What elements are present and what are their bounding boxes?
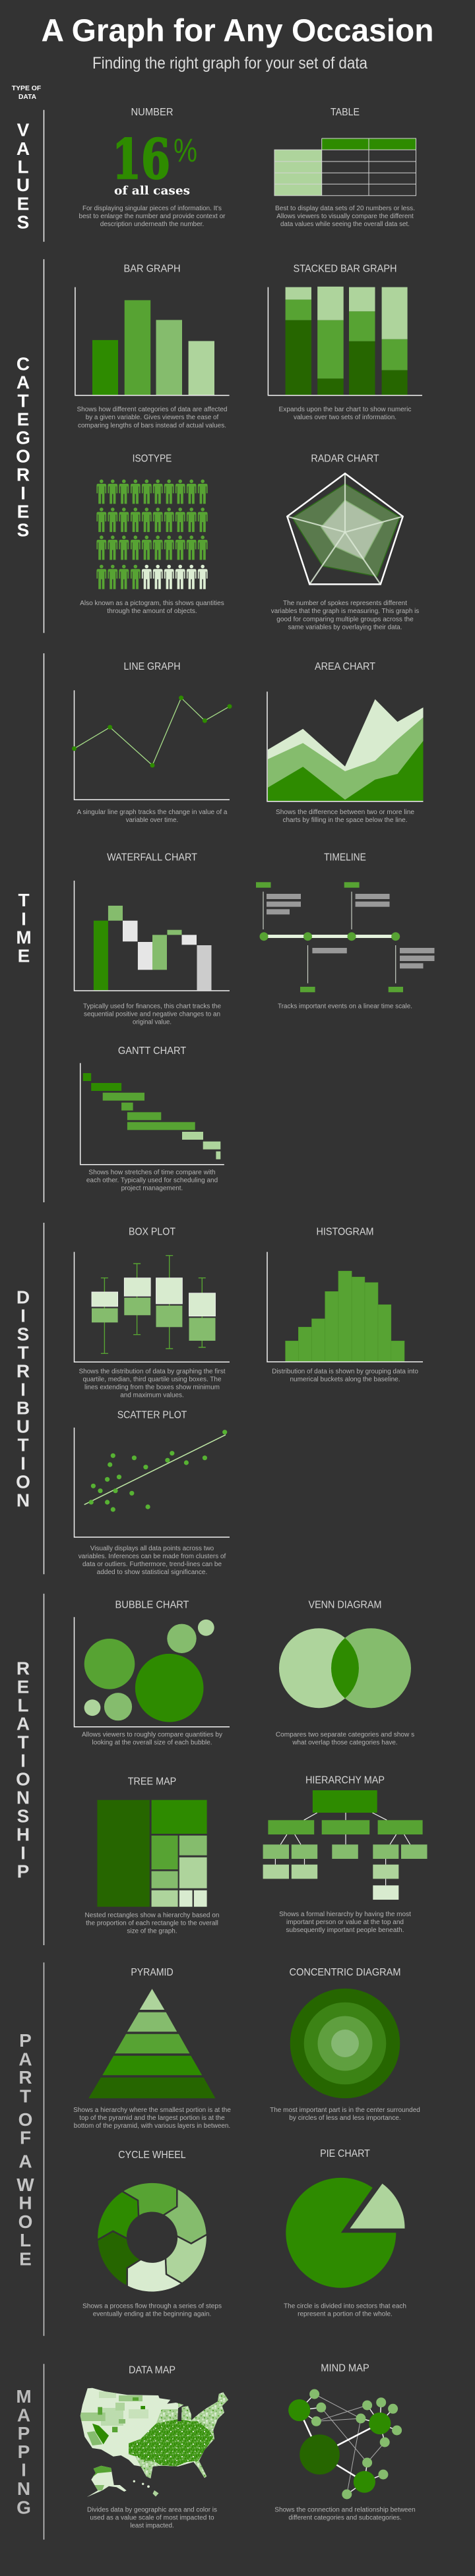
- description: hierarchy map: important person or value at the top and: [286, 1919, 404, 1926]
- heading: pyramid: PYRAMID: [131, 1967, 174, 1978]
- section: distribution: [16, 1223, 423, 1576]
- description: bar graph: comparing lengths of bars instead of actual values.: [78, 422, 226, 429]
- venn diagram graphic: [279, 1628, 411, 1708]
- description: hierarchy map: subsequently important people beneath.: [286, 1927, 404, 1934]
- big number 16 percent: of all cases: [114, 184, 190, 198]
- heading: waterfall chart: WATERFALL CHART: [107, 852, 197, 864]
- panel: isotype: [80, 454, 224, 615]
- section label: categories: S: [17, 519, 29, 540]
- description: number: For displaying singular pieces of information. It's: [82, 205, 222, 212]
- description: scatter plot: Visually displays all data points across two: [90, 1545, 214, 1552]
- heading: cycle wheel: CYCLE WHEEL: [118, 2150, 186, 2161]
- description: concentric diagram: The most important part is in the center surrounded: [270, 2107, 420, 2114]
- section rule: time: [44, 653, 45, 1202]
- description: line graph: A singular line graph tracks the change in value of a: [77, 809, 228, 816]
- description: venn diagram: what overlap those categories have.: [292, 1740, 398, 1747]
- section label: mapping: I: [21, 2460, 26, 2480]
- heading: histogram: HISTOGRAM: [317, 1226, 373, 1237]
- section label: relationship: T: [17, 1732, 29, 1752]
- section rule: values: [44, 110, 45, 242]
- description: pie chart: [284, 2302, 406, 2318]
- heading: mind map: MIND MAP: [321, 2362, 369, 2374]
- section label: part of a whole: R: [18, 2067, 32, 2088]
- big number 16 percent: 16: [112, 129, 170, 192]
- section: categories: [16, 259, 422, 633]
- panel: line graph: [72, 661, 232, 824]
- panel: gantt chart: [80, 1045, 224, 1192]
- pie chart graphic: [286, 2178, 405, 2288]
- panel: pie chart: [284, 2148, 406, 2318]
- description: hierarchy map: [279, 1911, 411, 1934]
- section label: values: V: [17, 120, 30, 140]
- heading: line graph: LINE GRAPH: [124, 661, 181, 672]
- description: data map: [87, 2507, 217, 2530]
- description: gantt chart: [86, 1169, 218, 1192]
- section label: time: I: [21, 908, 26, 929]
- section label: mapping: G: [16, 2497, 31, 2517]
- section label: distribution: O: [16, 1471, 30, 1492]
- description: venn diagram: Compares two separate categories and show s: [276, 1732, 414, 1739]
- description: gantt chart: project management.: [121, 1185, 183, 1192]
- panel: data map: [76, 2365, 231, 2530]
- description: bar graph: by a given variable. Gives viewers the ease of: [86, 414, 219, 421]
- description: data map: used as a value scale of most impacted to: [90, 2515, 214, 2522]
- heading: radar chart: RADAR CHART: [311, 454, 379, 464]
- description: box plot: Shows the distribution of data by graphing the first: [79, 1368, 226, 1375]
- box plot graphic: [74, 1252, 230, 1362]
- section label: relationship: I: [20, 1842, 26, 1863]
- panel: venn diagram: [276, 1599, 414, 1747]
- section label: part of a whole: P: [19, 2030, 32, 2051]
- description: pyramid: bottom of the pyramid, with various layers in between.: [74, 2122, 230, 2130]
- description: box plot: quartile, median, third quartile using boxes. The: [83, 1376, 222, 1383]
- section label: distribution: U: [16, 1416, 30, 1436]
- section label: relationship: A: [16, 1713, 30, 1734]
- description: area chart: charts by filling in the space below the line.: [282, 817, 408, 824]
- description: scatter plot: variables. Inferences can be made from clusters of: [79, 1553, 226, 1560]
- table graphic: [274, 138, 416, 196]
- title: A Graph for Any Occasion: [41, 13, 434, 48]
- section label: distribution: I: [20, 1379, 26, 1399]
- section label: distribution: S: [17, 1324, 29, 1344]
- description: histogram: [272, 1368, 418, 1383]
- section label: mapping: A: [17, 2405, 30, 2425]
- description: hierarchy map: Shows a formal hierarchy by having the most: [279, 1911, 411, 1918]
- section label: relationship: I: [20, 1750, 26, 1771]
- section label: distribution: I: [20, 1305, 26, 1326]
- panel: histogram: [267, 1226, 423, 1383]
- description: bubble chart: [82, 1732, 222, 1747]
- description: pyramid: top of the pyramid and the largest portion is at the: [79, 2115, 225, 2122]
- section label: time: M: [16, 927, 32, 948]
- description: waterfall chart: sequential positive and negative changes to an: [84, 1010, 220, 1018]
- panel: concentric diagram: [270, 1967, 420, 2122]
- panel: area chart: [267, 661, 424, 824]
- description: box plot: [79, 1368, 226, 1399]
- map inset: alaska: [87, 2466, 127, 2497]
- section label: relationship: S: [17, 1805, 29, 1826]
- description: radar chart: variables that the graph is measuring. This graph is: [271, 608, 419, 615]
- section: mapping: [16, 2362, 416, 2540]
- description: isotype: through the amount of objects.: [107, 608, 197, 615]
- section label: mapping: P: [18, 2423, 30, 2444]
- description: radar chart: good for comparing multiple groups across the: [276, 616, 414, 624]
- description: mind map: Shows the connection and relationship between: [274, 2507, 416, 2514]
- section label: values: U: [16, 175, 30, 195]
- radar chart graphic: [287, 473, 403, 584]
- heading: box plot: BOX PLOT: [129, 1226, 175, 1237]
- section label: distribution: N: [16, 1490, 30, 1510]
- description: bar graph: Shows how different categories of data are affected: [77, 406, 227, 413]
- description: number: description underneath the number.: [100, 221, 204, 228]
- description: table: [275, 205, 415, 228]
- data map graphic: [76, 2383, 231, 2497]
- concentric diagram graphic: [290, 1989, 400, 2098]
- panel: timeline: [256, 852, 434, 1010]
- histogram graphic: [267, 1252, 423, 1362]
- description: bubble chart: looking at the overall size of each bubble.: [92, 1740, 212, 1747]
- isotype pictogram: [96, 479, 208, 589]
- section: part of a whole: [16, 1962, 420, 2336]
- section: relationship: [16, 1594, 428, 1945]
- section label: part of a whole: L: [20, 2230, 31, 2250]
- description: pyramid: [73, 2107, 231, 2130]
- section label: time: E: [18, 945, 30, 966]
- description: cycle wheel: Shows a process flow through a series of steps: [82, 2302, 222, 2310]
- section label: mapping: M: [16, 2386, 32, 2407]
- description: mind map: [274, 2507, 416, 2522]
- section label: categories: E: [17, 501, 29, 521]
- section label: relationship: E: [17, 1676, 29, 1697]
- description: bar graph: [77, 406, 227, 429]
- description: bubble chart: Allows viewers to roughly compare quantities by: [82, 1732, 222, 1739]
- section label: relationship: N: [16, 1787, 30, 1807]
- description: concentric diagram: by circles of less and less importance.: [289, 2115, 401, 2122]
- heading: stacked bar graph: STACKED BAR GRAPH: [293, 264, 397, 275]
- description: gantt chart: each other. Typically used for scheduling and: [86, 1177, 218, 1184]
- description: tree map: the proportion of each rectangle to the overall: [86, 1919, 218, 1927]
- section label: values: L: [17, 156, 29, 177]
- description: data map: least impacted.: [130, 2523, 174, 2530]
- description: table: Allows viewers to visually compare the different: [276, 213, 414, 220]
- description: area chart: [276, 809, 414, 824]
- section label: mapping: N: [17, 2478, 30, 2499]
- description: table: Best to display data sets of 20 numbers or less.: [275, 205, 415, 212]
- description: radar chart: The number of spokes represents different: [283, 600, 407, 607]
- cycle wheel graphic: [97, 2182, 207, 2293]
- panel: cycle wheel: [82, 2150, 222, 2318]
- section label: categories: O: [16, 446, 30, 466]
- section label: distribution: D: [16, 1287, 30, 1307]
- description: waterfall chart: [83, 1003, 221, 1026]
- description: number: best to enlarge the number and provide context or: [79, 213, 226, 220]
- waterfall chart graphic: [74, 881, 230, 991]
- panel: bar graph: [75, 264, 230, 429]
- section label: categories: A: [16, 372, 30, 392]
- section label: values: S: [17, 212, 29, 233]
- section rule: part of a whole: [44, 1962, 45, 2336]
- section label: relationship: O: [16, 1769, 30, 1789]
- section label: values: A: [16, 138, 30, 159]
- description: gantt chart: Shows how stretches of time compare with: [88, 1169, 216, 1176]
- section label: part of a whole: E: [19, 2249, 32, 2269]
- section label: categories: E: [17, 409, 29, 429]
- column label: type of data: DATA: [18, 93, 36, 101]
- section label: part of a whole: A: [18, 2151, 32, 2171]
- section label: distribution: B: [16, 1397, 30, 1418]
- stacked bar chart: [268, 287, 422, 395]
- description: tree map: [84, 1912, 219, 1935]
- panel: radar chart: [271, 454, 419, 631]
- section label: categories: I: [20, 483, 26, 503]
- description: line graph: [77, 809, 228, 824]
- section label: distribution: T: [17, 1342, 29, 1362]
- description: venn diagram: [276, 1732, 414, 1747]
- section label: categories: G: [16, 427, 30, 448]
- description: number: [79, 205, 226, 228]
- panel: bubble chart: [74, 1599, 230, 1747]
- section label: mapping: P: [18, 2442, 30, 2462]
- heading: hierarchy map: HIERARCHY MAP: [305, 1775, 385, 1786]
- big number 16 percent: %: [174, 132, 197, 169]
- heading: pie chart: PIE CHART: [320, 2148, 370, 2159]
- heading: concentric diagram: CONCENTRIC DIAGRAM: [289, 1967, 401, 1978]
- section label: relationship: H: [16, 1824, 30, 1844]
- scatter plot graphic: [74, 1428, 230, 1537]
- description: box plot: and maximum values.: [120, 1391, 184, 1399]
- heading: isotype: ISOTYPE: [133, 454, 172, 464]
- heading: number: NUMBER: [131, 107, 173, 118]
- description: histogram: Distribution of data is shown by grouping data into: [272, 1368, 418, 1375]
- section label: part of a whole: W: [16, 2175, 34, 2195]
- section label: categories: T: [17, 390, 29, 411]
- description: stacked bar graph: values over two sets of information.: [294, 414, 396, 421]
- mind map graphic: [288, 2389, 402, 2500]
- section label: part of a whole: F: [20, 2128, 31, 2148]
- description: cycle wheel: [82, 2302, 222, 2318]
- description: cycle wheel: eventually ending at the beginning again.: [93, 2310, 211, 2318]
- description: tree map: size of the graph.: [127, 1927, 177, 1935]
- section label: values: E: [17, 193, 29, 214]
- description: mind map: different categories and subcategories.: [288, 2515, 402, 2522]
- panel: table: [274, 107, 416, 228]
- gantt chart graphic: [80, 1063, 224, 1165]
- section rule: relationship: [44, 1594, 45, 1945]
- section label: categories: C: [16, 353, 30, 374]
- panel: waterfall chart: [74, 852, 230, 1026]
- subtitle: Finding the right graph for your set of data: [92, 54, 367, 73]
- description: stacked bar graph: Expands upon the bar chart to show numeric: [278, 406, 412, 413]
- description: scatter plot: data or outliers. Furthermore, trend-lines can be: [82, 1561, 222, 1568]
- description: isotype: Also known as a pictogram, this shows quantities: [80, 600, 224, 607]
- description: isotype: [80, 600, 224, 615]
- description: tree map: Nested rectangles show a hierarchy based on: [84, 1912, 219, 1919]
- section rule: categories: [44, 259, 45, 633]
- heading: timeline: TIMELINE: [324, 852, 366, 864]
- line chart: [72, 690, 232, 800]
- description: radar chart: same variables by overlaying their data.: [288, 624, 402, 631]
- description: waterfall chart: Typically used for finances, this chart tracks the: [83, 1003, 221, 1010]
- description: scatter plot: added to show statistical significance.: [97, 1569, 207, 1576]
- description: table: data values while seeing the overall data set.: [280, 221, 410, 228]
- description: waterfall chart: original value.: [133, 1018, 172, 1026]
- heading: table: TABLE: [331, 107, 360, 118]
- map inset: hawaii: [133, 2480, 158, 2497]
- heading: bubble chart: BUBBLE CHART: [115, 1599, 189, 1610]
- panel: pyramid: [73, 1967, 231, 2130]
- column label: type of data: TYPE OF: [12, 84, 42, 92]
- section label: part of a whole: O: [18, 2109, 32, 2130]
- section: values: [16, 107, 416, 242]
- description: data map: Divides data by geographic area and color is: [87, 2507, 217, 2514]
- description: box plot: lines extending from the boxes show minimum: [84, 1384, 220, 1391]
- heading: tree map: TREE MAP: [128, 1776, 176, 1787]
- description: stacked bar graph: [278, 406, 412, 421]
- description: line graph: variable over time.: [126, 817, 178, 824]
- pyramid graphic: [88, 1989, 215, 2098]
- description: histogram: numerical buckets along the baseline.: [290, 1376, 400, 1383]
- section label: part of a whole: A: [18, 2049, 32, 2069]
- heading: gantt chart: GANTT CHART: [118, 1045, 186, 1057]
- heading: venn diagram: VENN DIAGRAM: [309, 1599, 381, 1610]
- section label: part of a whole: H: [18, 2193, 32, 2213]
- panel: box plot: [74, 1226, 230, 1399]
- panel: mind map: [274, 2362, 416, 2522]
- heading: bar graph: BAR GRAPH: [124, 264, 181, 275]
- heading: area chart: AREA CHART: [315, 661, 375, 672]
- section label: categories: R: [16, 464, 30, 484]
- section label: distribution: I: [20, 1453, 26, 1473]
- description: pie chart: represent a portion of the whole.: [298, 2310, 393, 2318]
- timeline graphic: [256, 882, 434, 992]
- section label: time: T: [18, 890, 30, 910]
- section rule: distribution: [44, 1223, 45, 1574]
- panel: number: [79, 107, 226, 228]
- description: scatter plot: [79, 1545, 226, 1576]
- area chart graphic: [267, 691, 424, 802]
- heading: scatter plot: SCATTER PLOT: [117, 1410, 187, 1421]
- description: timeline: Tracks important events on a linear time scale.: [278, 1003, 412, 1010]
- section: time: [16, 653, 434, 1202]
- column label: type of data: [12, 84, 42, 101]
- tree map graphic: [97, 1800, 207, 1907]
- section label: distribution: R: [16, 1361, 30, 1381]
- panel: hierarchy map: [263, 1775, 428, 1934]
- section label: distribution: T: [17, 1434, 29, 1455]
- section label: part of a whole: T: [20, 2086, 31, 2106]
- panel: scatter plot: [74, 1410, 230, 1576]
- section label: relationship: P: [17, 1861, 29, 1881]
- heading: data map: DATA MAP: [129, 2365, 175, 2376]
- description: area chart: Shows the difference between two or more line: [276, 809, 414, 816]
- section label: part of a whole: O: [18, 2211, 32, 2232]
- description: concentric diagram: [270, 2107, 420, 2122]
- panel: tree map: [84, 1776, 219, 1935]
- description: pie chart: The circle is divided into sectors that each: [284, 2302, 406, 2310]
- section label: relationship: L: [17, 1695, 29, 1715]
- bubble chart graphic: [74, 1617, 230, 1727]
- bar chart: [75, 287, 230, 395]
- hierarchy map graphic: [263, 1790, 428, 1900]
- section rule: mapping: [44, 2364, 45, 2540]
- description: pyramid: Shows a hierarchy where the smallest portion is at the: [73, 2107, 231, 2114]
- description: radar chart: [271, 600, 419, 631]
- section label: relationship: R: [16, 1658, 30, 1678]
- panel: stacked bar graph: [268, 264, 422, 421]
